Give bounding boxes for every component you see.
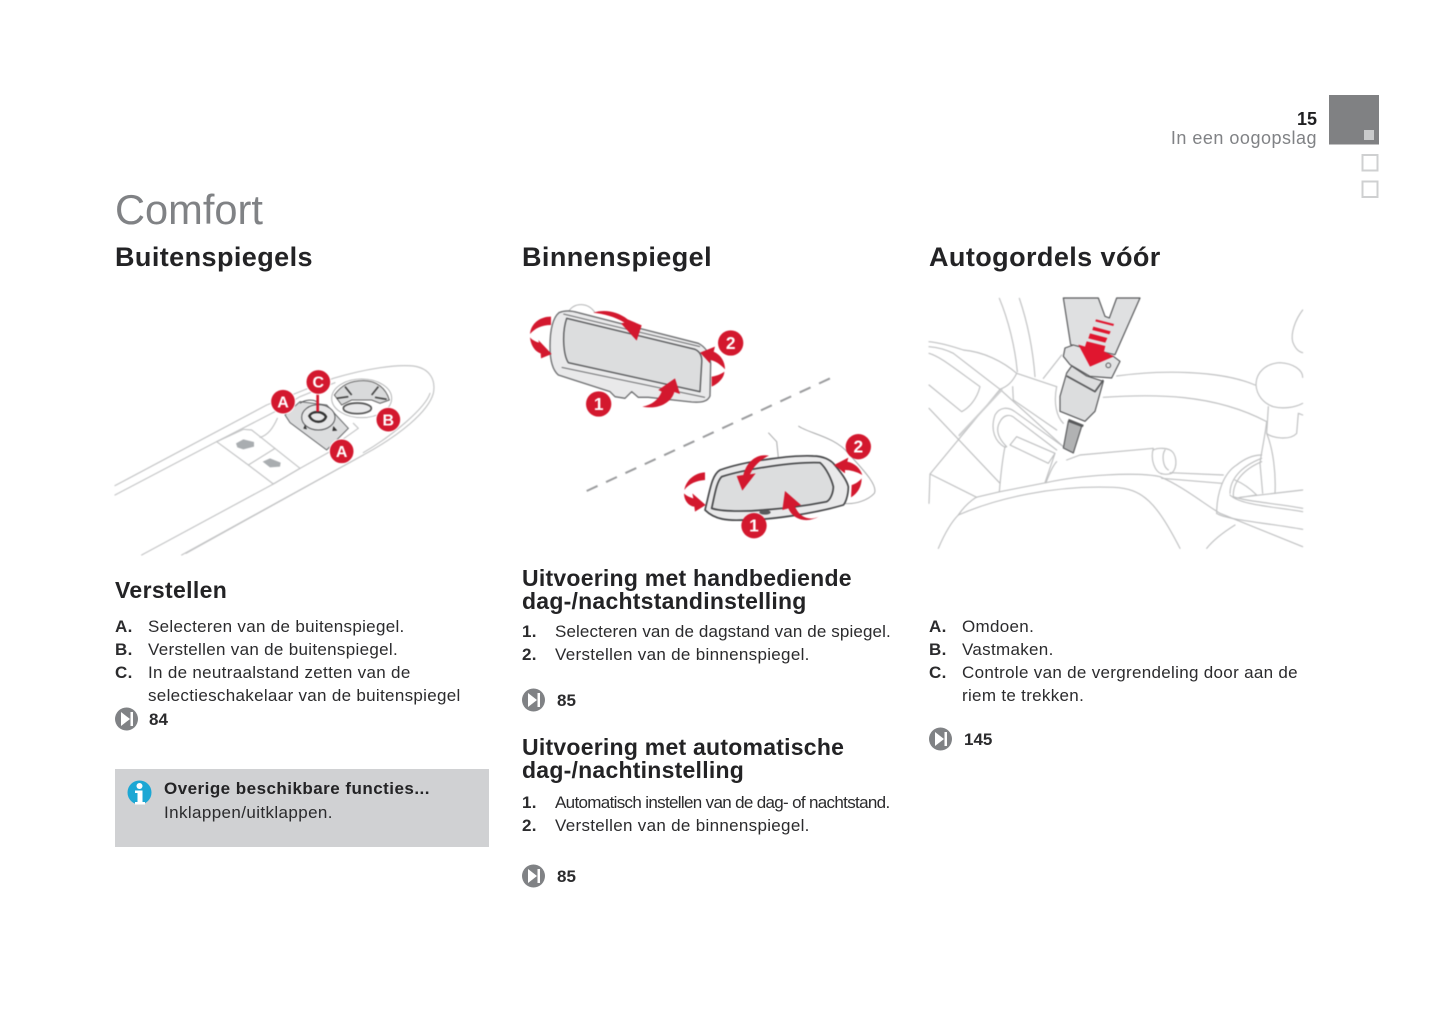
illustration: rear view mirrors: 1 [749, 516, 759, 536]
list: mirror steps: selectieschakelaar van de buitenspiegel [148, 686, 461, 705]
list: mirror steps: B. [115, 640, 133, 659]
page reference 85 [522, 688, 576, 712]
subheading: automatic: dag-/nachtinstelling [522, 757, 744, 783]
illustration: door mirror controls: A [277, 394, 289, 411]
mirror adjuster [332, 379, 392, 418]
dashed divider [587, 377, 832, 491]
list: manual steps: Selecteren van de dagstand van de spiegel. [555, 622, 891, 641]
illustration: seat belt [928, 296, 1304, 550]
callout: other functions: Inklappen/uitklappen. [164, 803, 333, 822]
page reference 85: 85 [557, 867, 576, 886]
page reference 145 [929, 728, 992, 750]
list: manual steps: Verstellen van de binnenspiegel. [555, 645, 810, 664]
callout: other functions: Overige beschikbare functies... [164, 779, 430, 798]
callout: other functions [115, 769, 489, 847]
selector panel [285, 400, 348, 450]
mirror, manual [550, 305, 711, 402]
list: seat belt steps: riem te trekken. [962, 686, 1084, 705]
list: mirror steps: Verstellen van de buitenspiegel. [148, 640, 398, 659]
section tabs [1329, 95, 1379, 198]
illustration: door mirror controls: B [383, 412, 394, 429]
illustration: rear view mirrors [529, 304, 876, 540]
list: manual steps: 2. [522, 645, 537, 664]
list: automatic steps: 2. [522, 816, 537, 835]
illustration: rear view mirrors: 2 [854, 437, 863, 457]
belt and buckle [1060, 298, 1140, 453]
list: seat belt steps: Vastmaken. [962, 640, 1054, 659]
icon: info [128, 780, 152, 804]
list: mirror steps: Selecteren van de buitenspiegel. [148, 617, 405, 636]
subheading: automatic: Uitvoering met automatische [522, 734, 844, 760]
section name: In een oogopslag [1171, 128, 1317, 148]
page number: 15 [1297, 109, 1317, 129]
mirror, automatic [705, 426, 875, 520]
page reference 85 [522, 864, 576, 888]
heading: Buitenspiegels: Buitenspiegels [115, 242, 313, 272]
list: automatic steps: Automatisch instellen van de dag- of nachtstand. [555, 793, 890, 812]
list: manual steps: 1. [522, 622, 537, 641]
illustration: rear view mirrors: 2 [726, 333, 735, 353]
page reference 145: 145 [964, 730, 992, 749]
subheading: manual: dag-/nachtstandinstelling [522, 588, 807, 614]
subheading: automatic [522, 734, 844, 783]
page reference 85: 85 [557, 691, 576, 710]
red pull arrow [1078, 319, 1114, 367]
list: seat belt steps: Omdoen. [962, 617, 1034, 636]
title: Comfort [115, 186, 263, 233]
list: seat belt steps: B. [929, 640, 947, 659]
number badges [586, 330, 871, 538]
callout letters [271, 370, 401, 464]
list: mirror steps: A. [115, 617, 133, 636]
subheading: manual [522, 565, 852, 614]
list: seat belt steps [929, 617, 1298, 705]
page reference 84: 84 [149, 710, 168, 729]
illustration: rear view mirrors: 1 [594, 394, 604, 414]
list: automatic steps: 1. [522, 793, 537, 812]
illustration: door mirror controls: C [313, 375, 325, 392]
illustration: door mirror controls [114, 364, 435, 556]
heading: Binnenspiegel: Binnenspiegel [522, 242, 712, 272]
window buttons [236, 439, 281, 467]
list: mirror steps: In de neutraalstand zetten van de [148, 663, 411, 682]
list: manual steps [522, 622, 891, 664]
subheading: Verstellen: Verstellen [115, 577, 227, 603]
heading: Autogordels vóór: Autogordels vóór [929, 242, 1161, 272]
list: seat belt steps: C. [929, 663, 947, 682]
list: seat belt steps: Controle van de vergrendeling door aan de [962, 663, 1298, 682]
list: automatic steps: Verstellen van de binnenspiegel. [555, 816, 810, 835]
red arrows [530, 311, 862, 520]
page reference 84 [115, 708, 168, 730]
subheading: manual: Uitvoering met handbediende [522, 565, 852, 591]
illustration: door mirror controls: A [336, 444, 348, 461]
list: mirror steps: C. [115, 663, 133, 682]
list: mirror steps [115, 617, 461, 705]
list: automatic steps [522, 793, 890, 835]
list: seat belt steps: A. [929, 617, 947, 636]
